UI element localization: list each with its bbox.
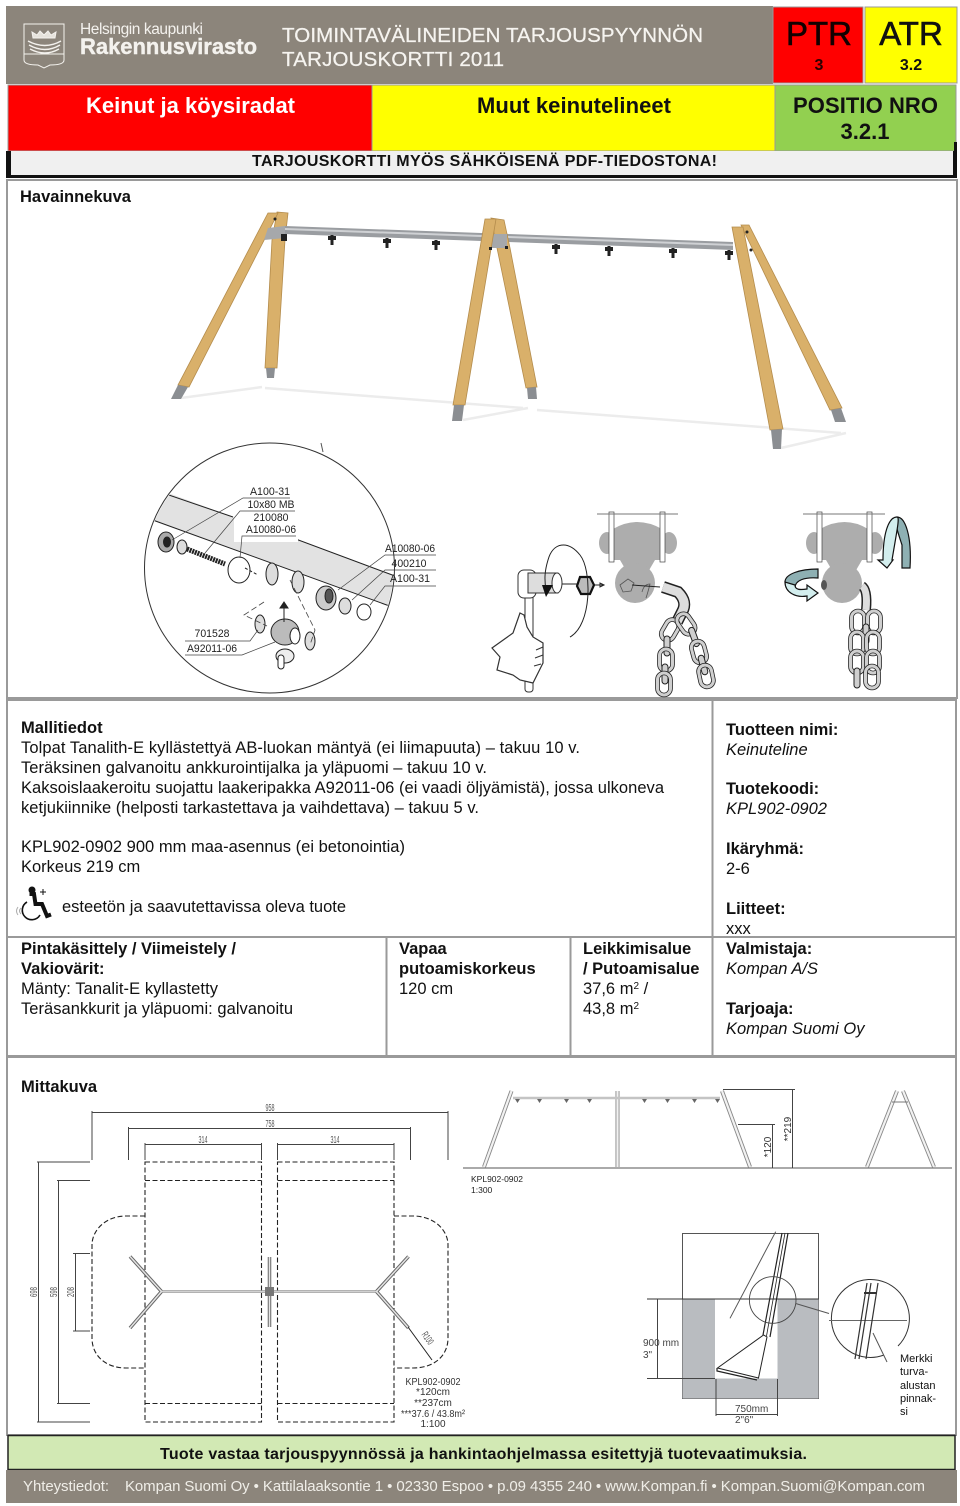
text block: surface finish: Pintakäsittely / Viimeistely / bbox=[21, 940, 236, 958]
drawing caption bbox=[401, 1377, 466, 1430]
category: Muut keinutelineet: Muut keinutelineet bbox=[477, 93, 672, 118]
position number: POSITIO NRO bbox=[793, 93, 938, 118]
text block: Mallitiedot: Korkeus 219 cm bbox=[21, 858, 140, 876]
panel: Mittakuva bbox=[7, 1057, 956, 1435]
drawing caption: KPL902-0902 bbox=[471, 1174, 523, 1184]
text block: surface finish: Mänty: Tanalit-E kyllastetty bbox=[21, 980, 219, 998]
text block: product identification: Kompan Suomi Oy bbox=[726, 1020, 866, 1038]
illustration: wrench tightening the bearing bbox=[492, 512, 715, 695]
PTR badge: 3 bbox=[815, 57, 824, 74]
drawing caption: 1:300 bbox=[471, 1185, 493, 1195]
note: surface marker: pinnak- bbox=[900, 1393, 936, 1405]
footer: contact details: Kompan Suomi Oy • Kattilalaaksontie 1 • 02330 Espoo • p.09 4355 240 • www.Kompan.fi • Kompan.Suomi@Kompan.com bbox=[125, 1478, 925, 1495]
note: surface marker bbox=[900, 1353, 936, 1418]
text block: product identification: Tuotteen nimi: bbox=[726, 721, 838, 739]
side elevation drawing: *120 bbox=[763, 1136, 774, 1157]
organisation name: Helsingin kaupunki bbox=[80, 21, 203, 38]
text block: product identification: Valmistaja: bbox=[726, 940, 812, 958]
text block: Mallitiedot bbox=[21, 719, 665, 876]
hand bbox=[492, 613, 543, 683]
hangers bbox=[515, 1099, 720, 1103]
category: Keinut ja köysiradat: Keinut ja köysiradat bbox=[86, 93, 296, 118]
title bbox=[282, 24, 703, 71]
footer: contact details bbox=[6, 1470, 957, 1503]
text block: play area: 2 bbox=[633, 1001, 639, 1012]
dimension labels: 958 bbox=[266, 1103, 275, 1114]
PDF notice bar bbox=[6, 142, 957, 178]
text block: play area: / Putoamisalue bbox=[583, 960, 699, 978]
text block: play area: 43,8 m bbox=[583, 1000, 633, 1018]
frame top view bbox=[130, 1256, 408, 1328]
drawing caption: **237cm bbox=[414, 1398, 452, 1409]
icon: accessible wheelchair bbox=[16, 886, 51, 920]
foundation drawing: 3" bbox=[643, 1350, 653, 1361]
dimension labels: 208 bbox=[66, 1287, 77, 1297]
left A-frame bbox=[171, 212, 288, 399]
chain bbox=[658, 587, 715, 695]
dimension labels: 698 bbox=[29, 1287, 40, 1297]
heading: Mittakuva: Mittakuva bbox=[21, 1078, 98, 1096]
text block: product identification: Tarjoaja: bbox=[726, 1000, 794, 1018]
text block: free fall height bbox=[399, 940, 536, 998]
foundation dimensions bbox=[647, 1299, 778, 1416]
chain bbox=[850, 586, 880, 688]
bearing body bbox=[599, 522, 677, 603]
text block: Mallitiedot: KPL902-0902 900 mm maa-asennus (ei betonointia) bbox=[21, 838, 405, 856]
text block: product identification: Keinuteline bbox=[726, 741, 808, 759]
PTR badge: PTR bbox=[786, 15, 852, 52]
text block: play area bbox=[583, 940, 699, 1018]
text block: Mallitiedot: Kaksoislaakeroitu suojattu laakeripakka A92011-06 (ei vaadi öljyämistä), jossa ulkoneva bbox=[21, 779, 665, 797]
note: surface marker: si bbox=[900, 1406, 908, 1418]
text block: product identification bbox=[726, 721, 866, 1038]
right A-frame bbox=[732, 225, 846, 449]
magnified detail circle bbox=[829, 1279, 909, 1362]
panel: product information bbox=[7, 700, 956, 1056]
dimension labels: R100 bbox=[419, 1330, 435, 1347]
note: surface marker: Merkki bbox=[900, 1353, 932, 1365]
category: Keinut ja köysiradat bbox=[8, 85, 372, 151]
text block: product identification: KPL902-0902 bbox=[726, 800, 827, 818]
drawing caption: *120cm bbox=[416, 1387, 450, 1398]
safety zones bbox=[92, 1162, 448, 1422]
text block: free fall height: Vapaa bbox=[399, 940, 448, 958]
text block: product identification: 2-6 bbox=[726, 860, 750, 878]
illustration: finished bearing with rotation arrows bbox=[785, 512, 910, 688]
text block: Mallitiedot: Teräksinen galvanoitu ankkurointijalka ja yläpuomi – takuu 10 v. bbox=[21, 759, 487, 777]
text block: surface finish: Teräsankkurit ja yläpuomi: galvanoitu bbox=[21, 1000, 293, 1018]
text block: Mallitiedot: Mallitiedot bbox=[21, 719, 103, 737]
part labels: A100-31 bbox=[250, 486, 290, 498]
part labels: 701528 bbox=[194, 628, 230, 640]
title: TARJOUSKORTTI 2011 bbox=[282, 48, 504, 71]
text block: product identification: Ikäryhmä: bbox=[726, 840, 804, 858]
foundation drawing: 900 mm bbox=[643, 1338, 679, 1349]
text block: play area: 2 bbox=[633, 981, 639, 992]
ATR badge: 3.2 bbox=[900, 57, 922, 74]
text block: Mallitiedot: ketjukiinnike (helposti tarkastettava ja vaihdettava) – takuu 5 v. bbox=[21, 799, 479, 817]
drawing caption: 1:100 bbox=[420, 1419, 446, 1430]
organisation name bbox=[80, 21, 257, 59]
bolt and washers bbox=[158, 532, 371, 669]
text block: play area: 37,6 m bbox=[583, 980, 633, 998]
position number: 3.2.1 bbox=[841, 119, 889, 144]
drawing caption: ***37.6 / 43.8m² bbox=[401, 1409, 466, 1420]
text block: product identification: Liitteet: bbox=[726, 900, 786, 918]
foundation drawing bbox=[643, 1232, 936, 1426]
note: surface marker: turva- bbox=[900, 1366, 928, 1378]
text block: play area: Leikkimisalue bbox=[583, 940, 691, 958]
text block: product identification: xxx bbox=[726, 920, 752, 938]
position number bbox=[775, 85, 956, 151]
dimension labels: 314 bbox=[330, 1135, 340, 1146]
text block: free fall height: putoamiskorkeus bbox=[399, 960, 536, 978]
arrow: horizontal rotation bbox=[785, 569, 818, 601]
dimension labels: 758 bbox=[266, 1119, 275, 1130]
part labels: 400210 bbox=[392, 558, 426, 570]
side elevation drawing bbox=[463, 1090, 952, 1195]
dimension labels: 598 bbox=[49, 1287, 60, 1297]
part labels: A92011-06 bbox=[187, 643, 237, 655]
text block: surface finish bbox=[21, 940, 293, 1018]
foundation drawing: 750mm bbox=[735, 1404, 768, 1415]
compliance statement band bbox=[8, 1436, 955, 1470]
side elevation drawing: **219 bbox=[783, 1116, 794, 1141]
illustration: swing frame bbox=[171, 212, 846, 449]
part labels: A10080-06 bbox=[246, 524, 296, 536]
PTR badge bbox=[773, 7, 863, 83]
part labels: A100-31 bbox=[390, 573, 430, 585]
dimension lines bbox=[37, 1111, 448, 1422]
category: Muut keinutelineet bbox=[372, 85, 775, 151]
note: surface marker: alustan bbox=[900, 1380, 935, 1392]
text: accessibility note: esteetön ja saavutettavissa oleva tuote bbox=[62, 898, 346, 916]
height dimensions bbox=[723, 1090, 795, 1168]
footer: contact details: Yhteystiedot: bbox=[23, 1478, 109, 1495]
text block: Mallitiedot: Tolpat Tanalith-E kyllästettyä AB-luokan mäntyä (ei liimapuuta) – takuu 10 v. bbox=[21, 739, 580, 757]
plan drawing bbox=[29, 1103, 466, 1430]
ATR badge: ATR bbox=[879, 15, 943, 52]
part labels: 10x80 MB bbox=[248, 499, 294, 511]
organisation name: Rakennusvirasto bbox=[80, 34, 257, 59]
wrench bbox=[492, 570, 604, 692]
part labels bbox=[187, 486, 435, 655]
compliance statement band: Tuote vastaa tarjouspyynnössä ja hankintaohjelmassa esitettyjä tuotevaatimuksia. bbox=[160, 1446, 807, 1463]
hangers bbox=[328, 235, 733, 260]
ATR badge bbox=[865, 7, 957, 83]
text block: product identification: Tuotekoodi: bbox=[726, 780, 819, 798]
header band bbox=[6, 6, 773, 84]
foundation drawing: 2"6" bbox=[735, 1415, 754, 1426]
part labels: 210080 bbox=[254, 512, 288, 524]
text block: product identification: Kompan A/S bbox=[726, 960, 818, 978]
heading: Havainnekuva: Havainnekuva bbox=[20, 188, 132, 206]
arrow: vertical rotation bbox=[878, 517, 910, 568]
beam bbox=[285, 226, 733, 250]
post and anchor bbox=[717, 1233, 788, 1380]
drawing caption: KPL902-0902 bbox=[406, 1377, 461, 1388]
text block: play area: / bbox=[639, 980, 649, 998]
text block: free fall height: 120 cm bbox=[399, 980, 453, 998]
illustration: exploded bearing detail bbox=[144, 443, 436, 693]
PDF notice bar: TARJOUSKORTTI MYÖS SÄHKÖISENÄ PDF-TIEDOSTONA! bbox=[252, 151, 717, 170]
text block: surface finish: Vakiovärit: bbox=[21, 960, 104, 978]
title: TOIMINTAVÄLINEIDEN TARJOUSPYYNNÖN bbox=[282, 24, 703, 47]
middle A-frame bbox=[452, 218, 537, 421]
drawing caption bbox=[471, 1174, 523, 1195]
dimension labels bbox=[29, 1103, 435, 1347]
panel: Havainnekuva bbox=[7, 180, 957, 698]
icon: Helsinki coat of arms bbox=[24, 24, 64, 68]
part labels: A10080-06 bbox=[385, 543, 435, 555]
dimension labels: 314 bbox=[198, 1135, 208, 1146]
